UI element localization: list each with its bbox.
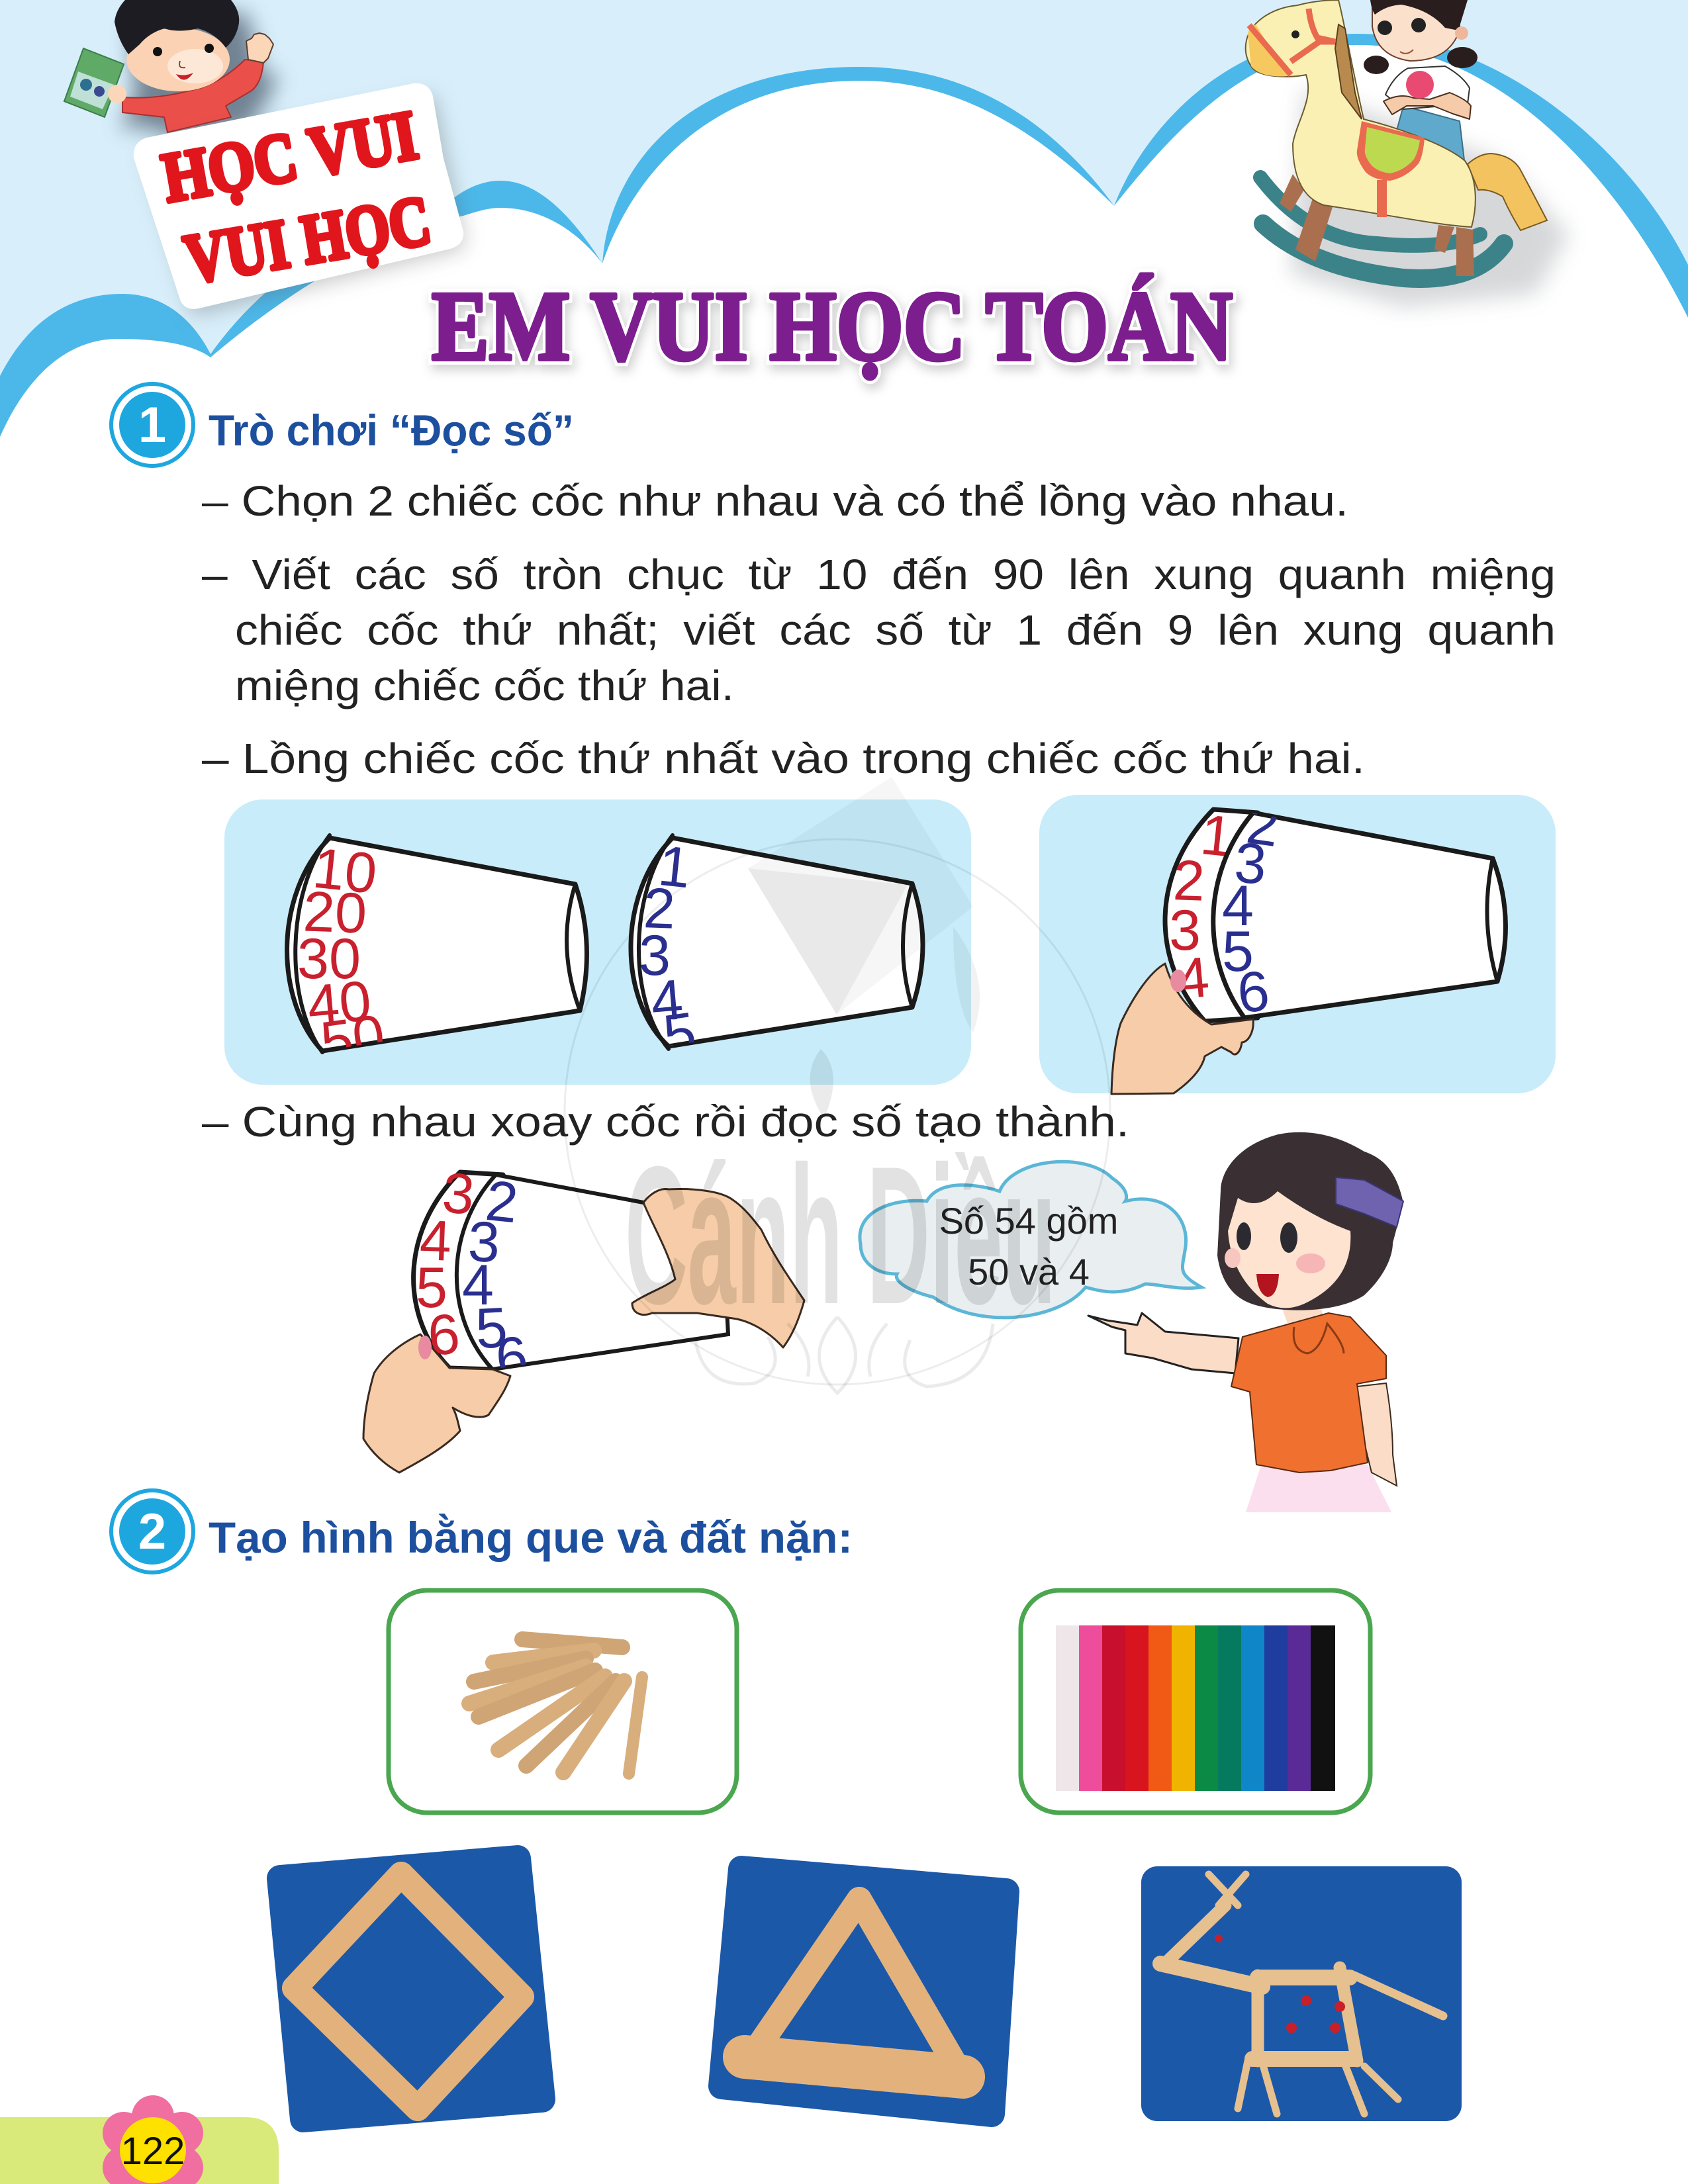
title: EM VUI HỌC TOÁN xyxy=(432,271,1233,381)
label: Học vui vui học: HỌC VUI xyxy=(157,96,423,217)
speech bubble: Số 54 gồm xyxy=(939,1200,1118,1242)
right hand xyxy=(632,1189,804,1347)
outer rim: 3 xyxy=(440,1161,477,1227)
outer rim: 5 xyxy=(416,1256,447,1320)
label: Học vui vui học xyxy=(136,86,465,316)
skirt xyxy=(1246,1465,1391,1512)
character: boy with book xyxy=(64,0,279,139)
box: popsicle sticks xyxy=(389,1590,737,1813)
girl rider xyxy=(1364,0,1477,160)
cup with units: 1 xyxy=(655,834,694,900)
panel: nested cups with hand xyxy=(1039,792,1556,1094)
collar xyxy=(1293,1324,1344,1353)
cup with tens: 40 xyxy=(305,969,373,1038)
heading 2: Tạo hình bằng que và đất nặn: xyxy=(209,1513,853,1562)
body xyxy=(1246,0,1476,227)
cup with tens: 20 xyxy=(302,880,368,946)
cup with tens: 10 xyxy=(310,836,380,906)
text: Cánh Diều xyxy=(625,1125,1056,1345)
watermark: kite and Cánh Diều xyxy=(565,777,1110,1393)
label: Học vui vui học: VUI HỌC xyxy=(179,181,436,298)
outer cup rim: 2 xyxy=(1172,848,1206,913)
hand xyxy=(1111,964,1253,1094)
inner cup: 6 xyxy=(1235,959,1272,1025)
heading 1: Trò chơi “Đọc số” xyxy=(209,406,574,455)
illustration: hands turning cups xyxy=(363,1161,804,1473)
inner cup: 3 xyxy=(1233,831,1268,897)
rockers xyxy=(1260,177,1480,246)
pointing arm xyxy=(1088,1313,1239,1373)
legs xyxy=(1280,174,1304,212)
inner cup xyxy=(1213,792,1505,1025)
panel: two separate cups xyxy=(224,799,971,1085)
page number: 122 xyxy=(121,2130,185,2173)
badge 2 xyxy=(111,1490,193,1572)
card: horse from sticks xyxy=(1141,1866,1462,2121)
badge 1: 1 xyxy=(138,397,166,453)
instructions text: – Lồng chiếc cốc thứ nhất vào trong chiếc cốc thứ hai. xyxy=(202,735,1365,782)
instructions text xyxy=(202,477,1556,782)
outer rim xyxy=(414,1161,503,1369)
shirt xyxy=(1231,1313,1386,1473)
instructions text: chiếc cốc thứ nhất; viết các số từ 1 đến 9 lên xung quanh xyxy=(235,606,1556,654)
sky background xyxy=(0,0,1688,463)
outer cup rim: 3 xyxy=(1169,899,1201,962)
outer rim: 4 xyxy=(418,1208,453,1273)
inner cup: 6 xyxy=(492,1324,531,1390)
right arm xyxy=(1357,1383,1397,1486)
instruction: rotate cups: – Cùng nhau xoay cốc rồi đọc số tạo thành. xyxy=(202,1098,1129,1146)
page number xyxy=(0,2095,279,2184)
inner cup: 5 xyxy=(474,1296,509,1361)
speech bubble: 50 và 4 xyxy=(968,1251,1090,1293)
character: pointing girl xyxy=(1088,1132,1403,1512)
inner cup: 4 xyxy=(462,1253,494,1317)
badge 2: 2 xyxy=(138,1504,166,1560)
character: girl on rocking horse xyxy=(1246,0,1569,307)
inner cup: 5 xyxy=(1222,920,1254,983)
instructions text: – Chọn 2 chiếc cốc như nhau và có thể lồng vào nhau. xyxy=(202,477,1348,525)
speech bubble xyxy=(860,1161,1201,1318)
cup with tens: 50 xyxy=(317,1003,389,1074)
hair xyxy=(1217,1132,1403,1310)
instructions text: miệng chiếc cốc thứ hai. xyxy=(235,662,734,709)
cup with units: 5 xyxy=(660,1000,700,1068)
card: triangle from sticks xyxy=(722,1869,1006,2114)
outer cup rim: 4 xyxy=(1174,945,1211,1011)
cup with units: 2 xyxy=(642,876,677,941)
outer cup rim xyxy=(1165,803,1258,1021)
face xyxy=(1228,1191,1350,1308)
cup with units: 3 xyxy=(639,924,671,987)
instructions text: – Viết các số tròn chục từ 10 đến 90 lên xung quanh miệng xyxy=(202,551,1556,598)
title: EM VUI HỌC TOÁN xyxy=(434,277,1235,387)
inner cup: 2 xyxy=(483,1169,521,1235)
title: EM VUI HỌC TOÁN xyxy=(432,271,1233,381)
inner cup: 2 xyxy=(1243,792,1283,859)
badge 1 xyxy=(111,384,193,466)
outer cup rim: 1 xyxy=(1197,803,1236,869)
inner cup: 3 xyxy=(467,1210,501,1275)
neck xyxy=(1278,1291,1324,1332)
cup with units: 4 xyxy=(648,968,685,1034)
cup with units xyxy=(631,834,923,1068)
bow xyxy=(1336,1177,1403,1227)
card: square from sticks xyxy=(280,1858,542,2119)
tail xyxy=(1468,154,1547,230)
box: modelling clay xyxy=(1021,1590,1370,1813)
inner cup: 4 xyxy=(1222,874,1254,938)
outer rim: 6 xyxy=(425,1302,462,1368)
left hand xyxy=(363,1334,510,1473)
cup with tens xyxy=(287,835,586,1074)
cup with tens: 30 xyxy=(297,927,361,991)
inner cup xyxy=(454,1174,731,1371)
